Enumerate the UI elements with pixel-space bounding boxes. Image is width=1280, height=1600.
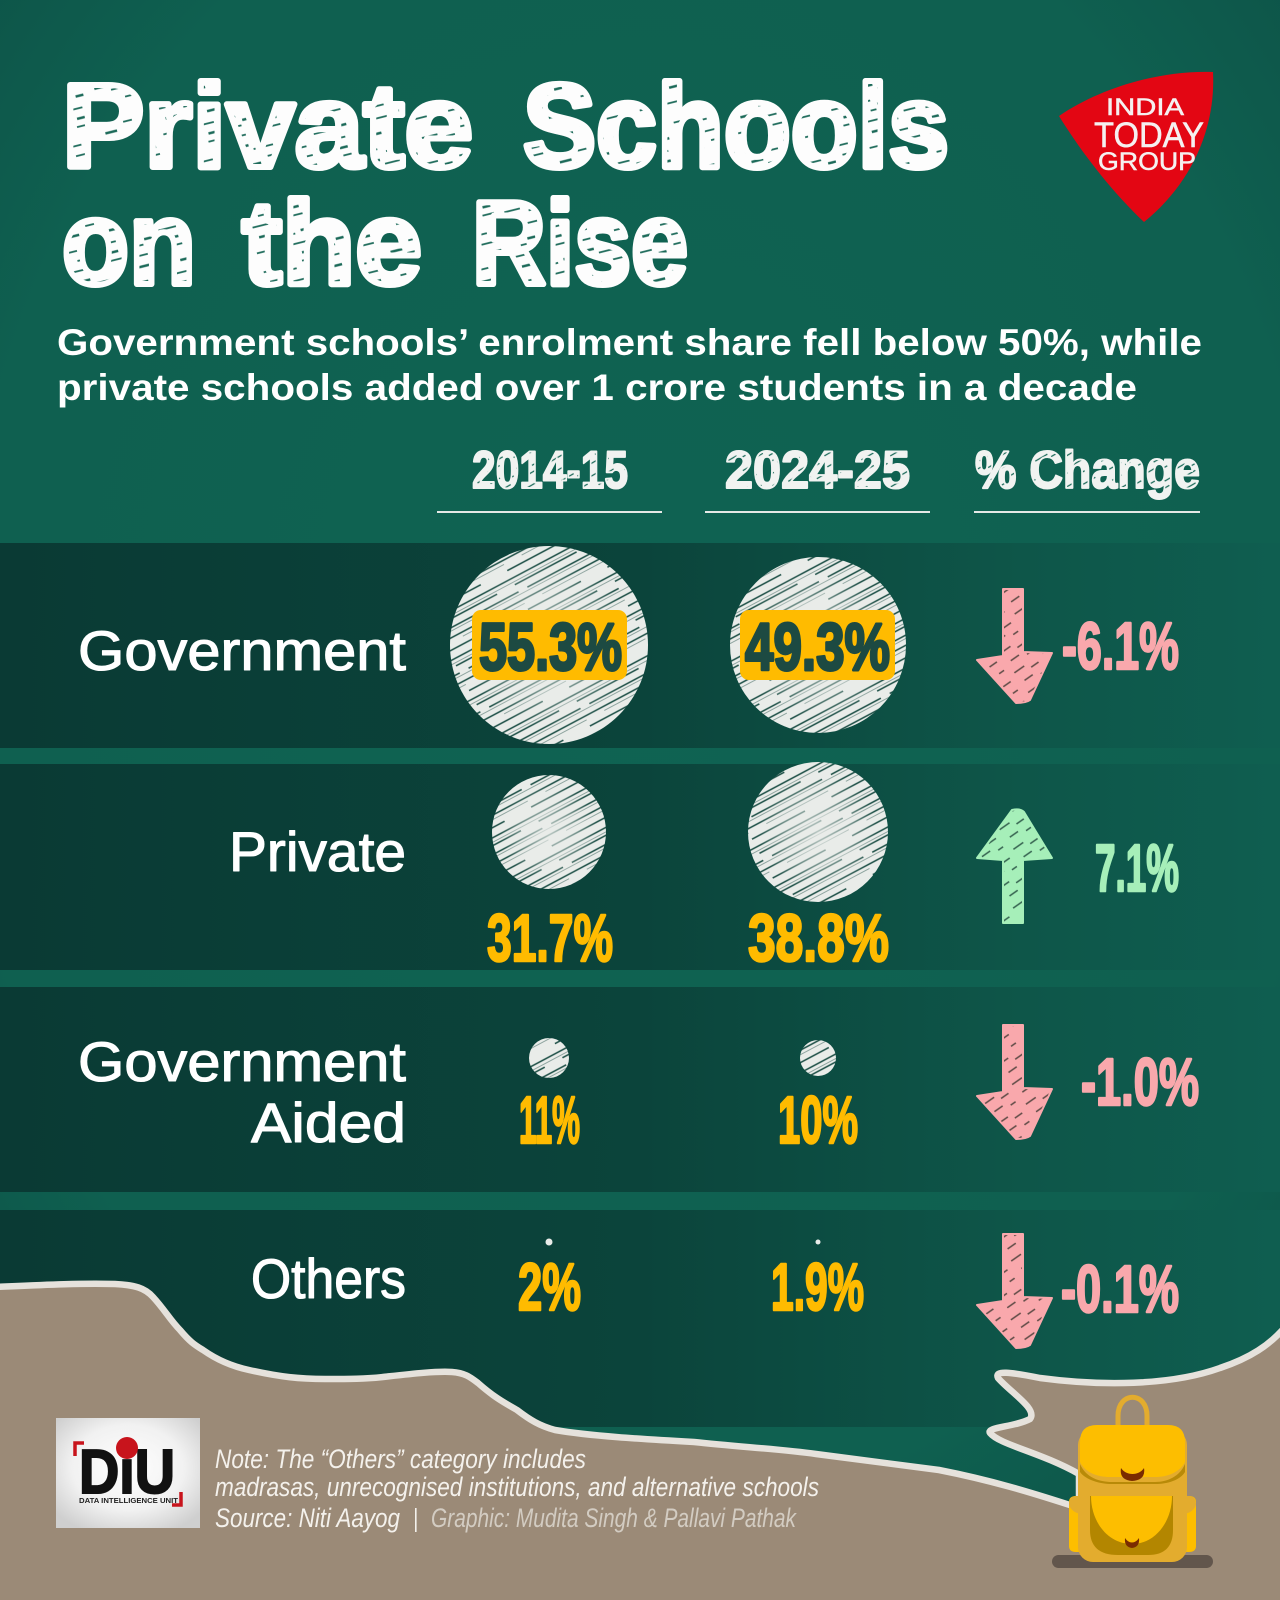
label: Government Aided: Government	[78, 1030, 406, 1093]
note and source	[215, 1444, 819, 1533]
row bands	[0, 543, 1280, 1427]
note and source: madrasas, unrecognised institutions, and alternative schools	[215, 1472, 819, 1502]
subtitle	[57, 322, 1202, 408]
title: Rise	[472, 177, 688, 310]
label: Government Aided	[78, 1030, 406, 1154]
row: Others	[251, 1234, 1179, 1348]
circle 2024-25	[730, 557, 906, 733]
note and source: Note: The “Others” category includes	[215, 1444, 586, 1474]
column headers: 2024-25	[725, 441, 910, 500]
logo: Data Intelligence Unit: DATA INTELLIGENCE UNIT	[79, 1496, 178, 1505]
value 55.3%: 55.3%	[479, 610, 622, 685]
circle 2014-15	[492, 775, 606, 889]
icon: backpack	[1052, 1397, 1213, 1568]
arrow down	[977, 1234, 1052, 1348]
title	[62, 60, 949, 310]
value 2%: 2%	[518, 1250, 581, 1325]
dot 2024-25	[816, 1240, 820, 1244]
column headers	[437, 441, 1200, 513]
circle 2024-25	[748, 762, 888, 902]
row: Government Aided	[78, 1025, 1199, 1158]
row: Private	[229, 762, 1179, 976]
title: Private	[62, 60, 473, 193]
row: Government	[78, 546, 1179, 744]
arrow down	[977, 589, 1052, 703]
column headers: 2014-15	[472, 441, 628, 500]
title: Schools	[523, 60, 949, 193]
value 31.7%: 31.7%	[487, 901, 613, 976]
value 10%: 10%	[778, 1083, 858, 1158]
subtitle: private schools added over 1 crore students in a decade	[57, 367, 1137, 408]
dot 2014-15	[546, 1238, 552, 1246]
label: Others: Others	[251, 1247, 406, 1310]
row: Government Aided: 11%	[519, 1083, 580, 1158]
ground with chalk edge	[0, 1284, 1280, 1600]
label: Government: Government	[78, 619, 406, 682]
change -1.0%: -1.0%	[1081, 1045, 1199, 1120]
change 7.1%: 7.1%	[1095, 831, 1179, 906]
title: on	[62, 177, 196, 310]
logo: India Today Group: GROUP	[1098, 148, 1196, 176]
logo: Data Intelligence Unit	[56, 1418, 200, 1528]
label: Government Aided: Aided	[251, 1091, 406, 1154]
subtitle: Government schools’ enrolment share fell below 50%, while	[57, 322, 1202, 363]
value 49.3%: 49.3%	[745, 610, 890, 685]
change -6.1%: -6.1%	[1062, 609, 1179, 684]
change -0.1%: -0.1%	[1061, 1252, 1179, 1327]
logo: India Today Group	[1059, 72, 1213, 222]
note and source: Graphic: Mudita Singh & Pallavi Pathak	[431, 1503, 797, 1533]
title: the	[242, 177, 422, 310]
logo: India Today Group: TODAY	[1094, 116, 1204, 155]
logo: India Today Group: INDIA	[1106, 94, 1184, 121]
logo: Data Intelligence Unit: DiU	[79, 1438, 175, 1507]
value 38.8%: 38.8%	[748, 901, 889, 976]
arrow down	[977, 1025, 1052, 1139]
circle 2024-25	[800, 1040, 836, 1076]
arrow up	[977, 809, 1052, 923]
column headers: % Change	[975, 441, 1200, 500]
circle 2014-15	[529, 1038, 569, 1078]
circle 2014-15	[450, 546, 648, 744]
label: Private: Private	[229, 820, 406, 883]
value 1.9%: 1.9%	[771, 1250, 864, 1325]
note and source: Source: Niti Aayog	[215, 1503, 400, 1533]
